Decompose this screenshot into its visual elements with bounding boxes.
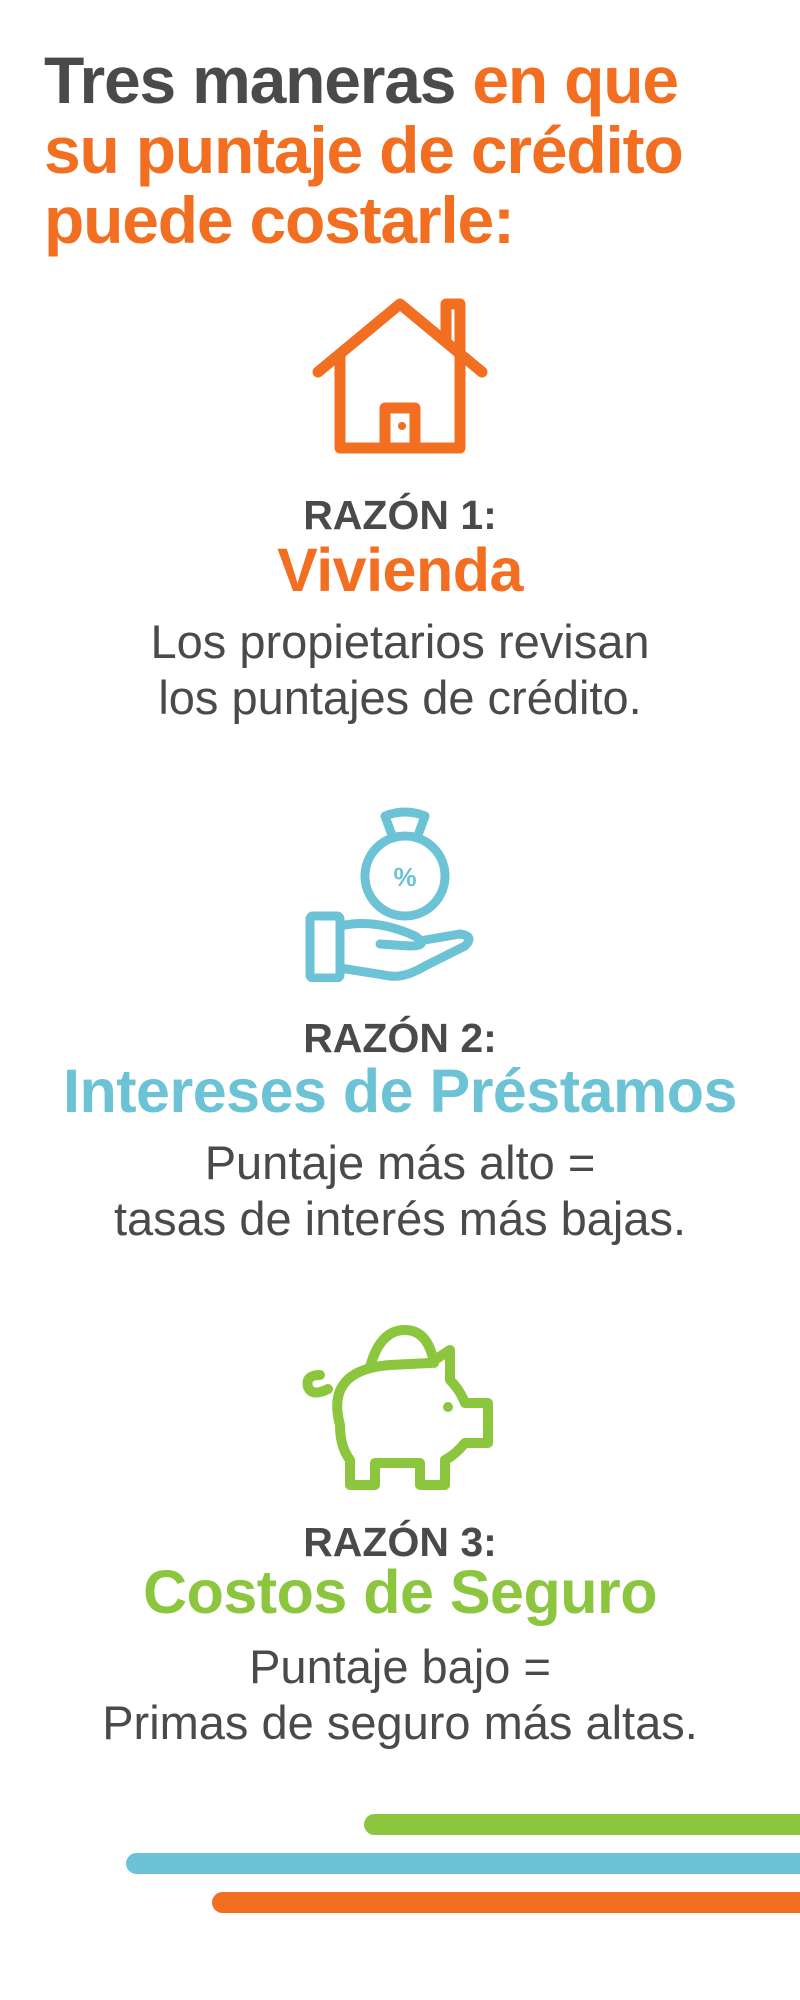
- text: razón 3: [102, 1640, 698, 1749]
- title: su puntaje de crédito: [44, 113, 683, 187]
- heading: costos de seguro: Costos de Seguro: [143, 1558, 657, 1626]
- text: razón 2: Puntaje más alto =: [205, 1136, 595, 1189]
- heading: vivienda: Vivienda: [277, 536, 523, 604]
- text: razón 1: Los propietarios revisan: [150, 615, 650, 668]
- heading: intereses: Intereses de Préstamos: [63, 1057, 737, 1125]
- icon: money bag in hand: %: [393, 862, 417, 892]
- title: [44, 43, 683, 257]
- text: razón 1: [150, 615, 650, 724]
- title: puede costarle:: [44, 183, 514, 257]
- text: razón 3: Primas de seguro más altas.: [102, 1696, 698, 1749]
- text: razón 2: tasas de interés más bajas.: [114, 1192, 686, 1245]
- heading: razón 1: RAZÓN 1:: [303, 492, 497, 538]
- title: Tres maneras en que: [44, 43, 678, 117]
- text: razón 3: Puntaje bajo =: [249, 1640, 551, 1693]
- icon: house: [312, 298, 488, 454]
- text: razón 1: los puntajes de crédito.: [158, 671, 642, 724]
- heading: razón 3: RAZÓN 3:: [303, 1519, 497, 1565]
- heading: razón 2: RAZÓN 2:: [303, 1015, 497, 1061]
- text: razón 2: [114, 1136, 686, 1245]
- icon: piggy bank: [302, 1325, 493, 1490]
- icon: money bag in hand: [306, 808, 474, 982]
- decorative bars: [126, 1814, 800, 1913]
